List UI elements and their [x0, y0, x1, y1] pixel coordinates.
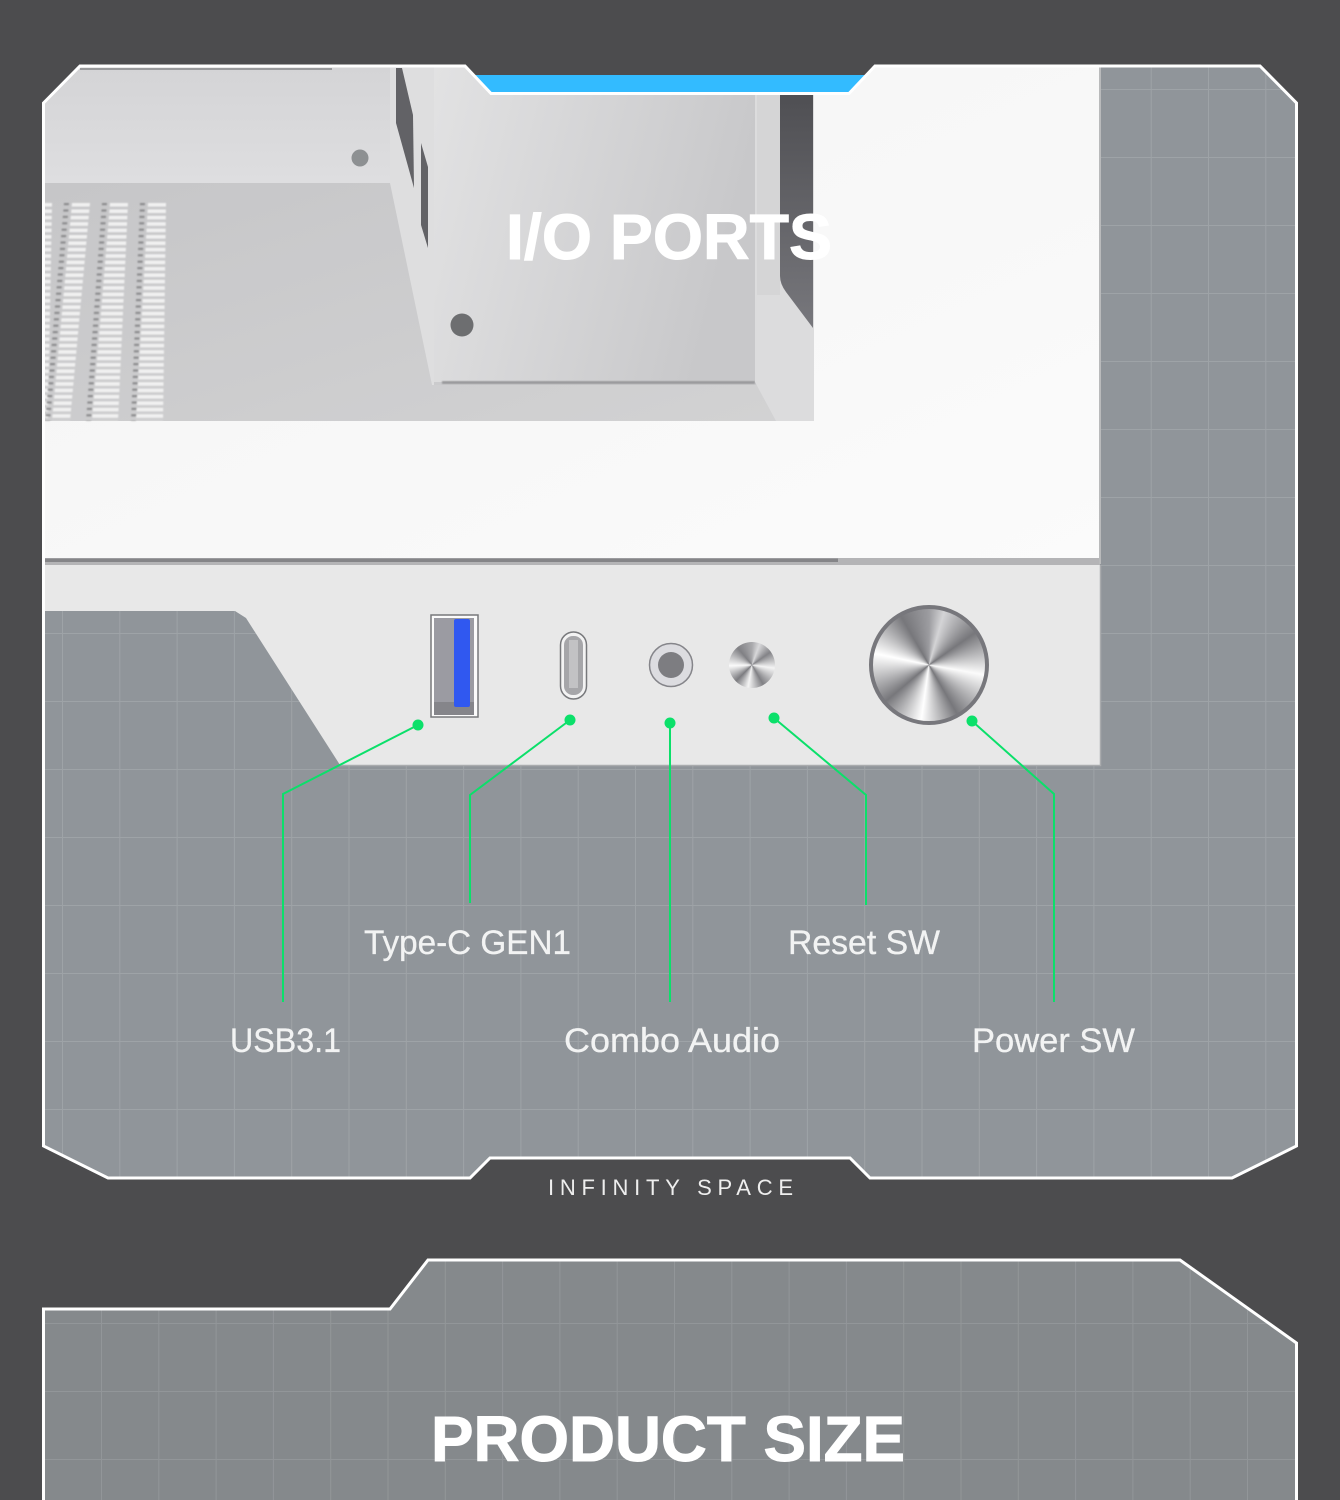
button: reset switch [729, 642, 775, 688]
callout: Reset SW: Reset SW [788, 924, 940, 962]
callout: Reset SW [768, 712, 940, 962]
panel: I/O ports [43, 66, 1297, 1200]
callout: Type-C GEN1 [364, 714, 576, 962]
port: Type-C [560, 632, 586, 699]
callout: Combo Audio [564, 718, 780, 1060]
port: USB 3.1 [431, 615, 478, 717]
callout: Type-C GEN1: Type-C GEN1 [364, 924, 571, 962]
panel outline [44, 1260, 1296, 1500]
product photo: case interior and front panel [44, 66, 1101, 766]
panel: product size [43, 1260, 1297, 1500]
panel outline [44, 66, 1296, 1178]
callout: Power SW [966, 716, 1135, 1060]
callout: USB3.1: USB3.1 [230, 1022, 341, 1060]
panel background with grid [43, 1260, 1297, 1500]
callout: USB3.1 [230, 720, 424, 1060]
title: I/O PORTS: I/O PORTS [506, 201, 832, 273]
title: PRODUCT SIZE: PRODUCT SIZE [431, 1403, 905, 1475]
callout: Combo Audio: Combo Audio [564, 1022, 780, 1060]
button: power switch [869, 605, 989, 725]
accent bar: blue top notch [475, 75, 865, 93]
tagline: INFINITY SPACE: INFINITY SPACE [548, 1175, 793, 1200]
panel background with grid [43, 66, 1297, 1178]
callout: Power SW: Power SW [972, 1022, 1135, 1060]
port: combo audio [650, 644, 692, 686]
